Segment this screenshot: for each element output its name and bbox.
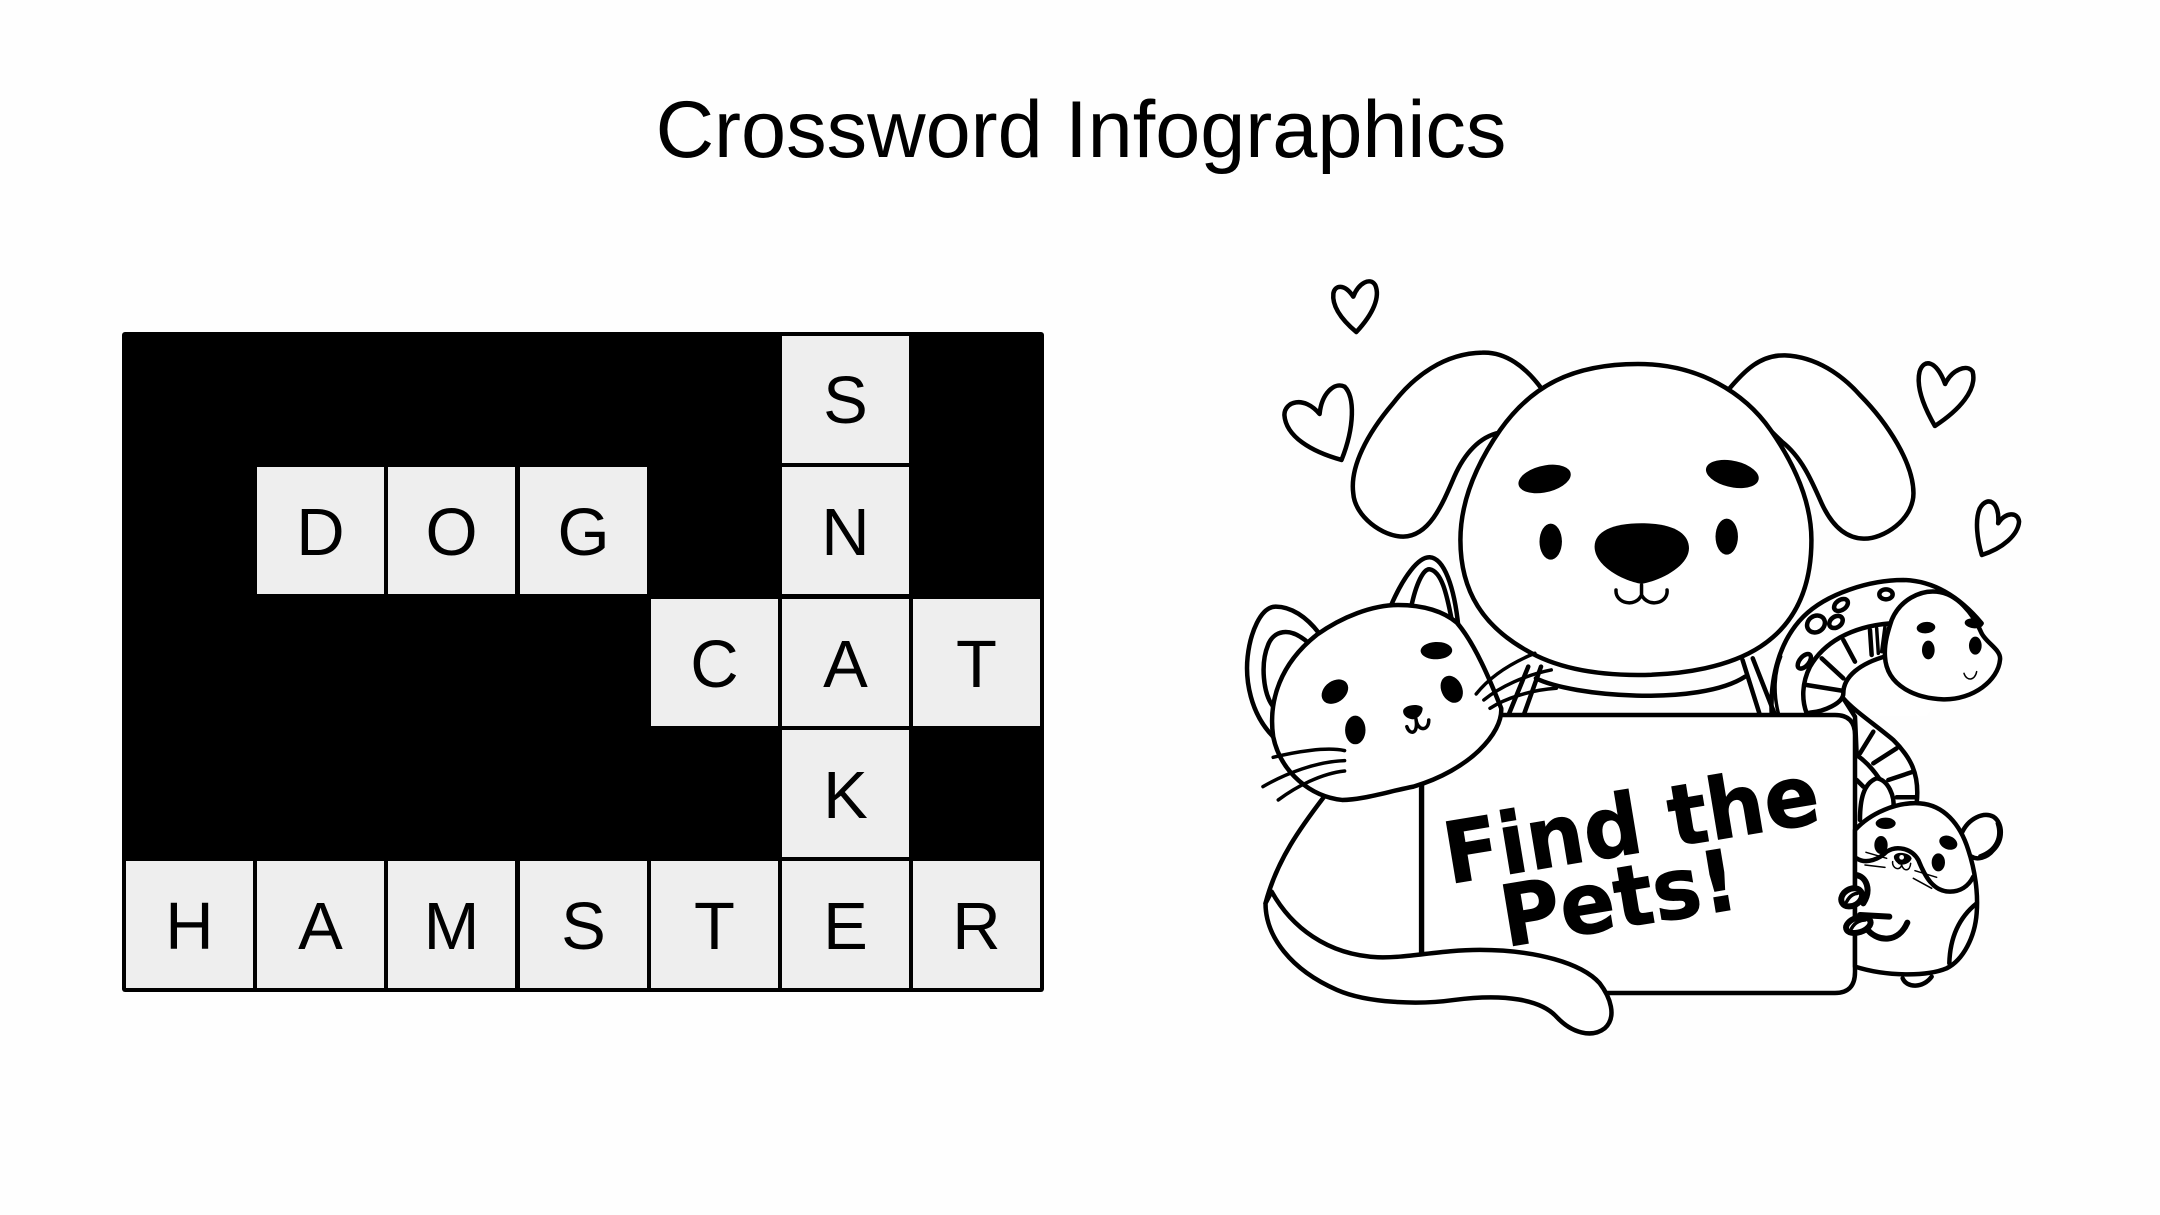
cell: H of hamster [126, 861, 253, 988]
dog [1353, 353, 1913, 717]
cell: K of snake: K [823, 758, 868, 833]
icon: dog head [1460, 364, 1811, 675]
title: Crossword Infographics [656, 85, 1506, 175]
cell: T of hamster: T [694, 889, 735, 964]
icon: dog right ear [1729, 355, 1913, 539]
cell: N of snake [782, 467, 909, 594]
icon: hamster face [1857, 818, 1973, 892]
cell: K of snake [782, 730, 909, 857]
cell: S of hamster: S [561, 889, 606, 964]
sign text: Find the [1436, 744, 1826, 904]
cell: T of cat [913, 599, 1040, 726]
icon: snake [1771, 580, 2000, 820]
icon: cat ears [1247, 557, 1458, 737]
icon: cat body and tail [1266, 788, 1611, 1033]
icon: dog straps and collar [1508, 658, 1776, 717]
cell: N of snake: N [821, 495, 870, 570]
cell: A of cat and snake [782, 599, 909, 726]
cell: S of snake: S [823, 363, 868, 438]
cell: G of dog: G [557, 495, 610, 570]
cell: O of dog: O [425, 495, 478, 570]
cell: M of hamster [388, 861, 515, 988]
cell: A of hamster [257, 861, 384, 988]
cell: R of hamster [913, 861, 1040, 988]
cell: T of hamster [651, 861, 778, 988]
sign text: Pets! [1493, 830, 1745, 967]
hamster [1838, 803, 2001, 986]
cell: A of cat and snake: A [823, 627, 868, 702]
cell: A of hamster: A [298, 889, 343, 964]
cell: T of cat: T [956, 627, 997, 702]
icon: cat head [1272, 605, 1501, 800]
cell: D of dog [257, 467, 384, 594]
icon: hamster foot [1903, 977, 1932, 986]
cell: G of dog [520, 467, 647, 594]
icon: dog face [1511, 454, 1766, 603]
cell: M of hamster: M [424, 889, 479, 964]
icon: hearts [1284, 281, 2019, 555]
cell: S of hamster [520, 861, 647, 988]
icon: hamster body [1855, 803, 1977, 974]
cell: D of dog: D [296, 495, 345, 570]
crossword grid [122, 332, 1044, 992]
cell: E of hamster and snake [782, 861, 909, 988]
cell: S of snake [782, 336, 909, 463]
icon: hamster hands and mouth [1838, 875, 1907, 939]
sign board [1422, 715, 1855, 993]
icon: cat face [1317, 641, 1466, 744]
icon: cat whiskers [1263, 653, 1556, 800]
cell: C of cat: C [690, 627, 739, 702]
illustration: pets holding sign [1247, 281, 2019, 1033]
cat [1247, 557, 1611, 1033]
cell: R of hamster: R [952, 889, 1001, 964]
cell: O of dog [388, 467, 515, 594]
cell: H of hamster: H [165, 889, 214, 964]
icon: hamster ear [1962, 815, 2001, 858]
icon: dog left ear [1353, 353, 1542, 537]
cell: E of hamster and snake: E [823, 889, 868, 964]
cell: C of cat [651, 599, 778, 726]
